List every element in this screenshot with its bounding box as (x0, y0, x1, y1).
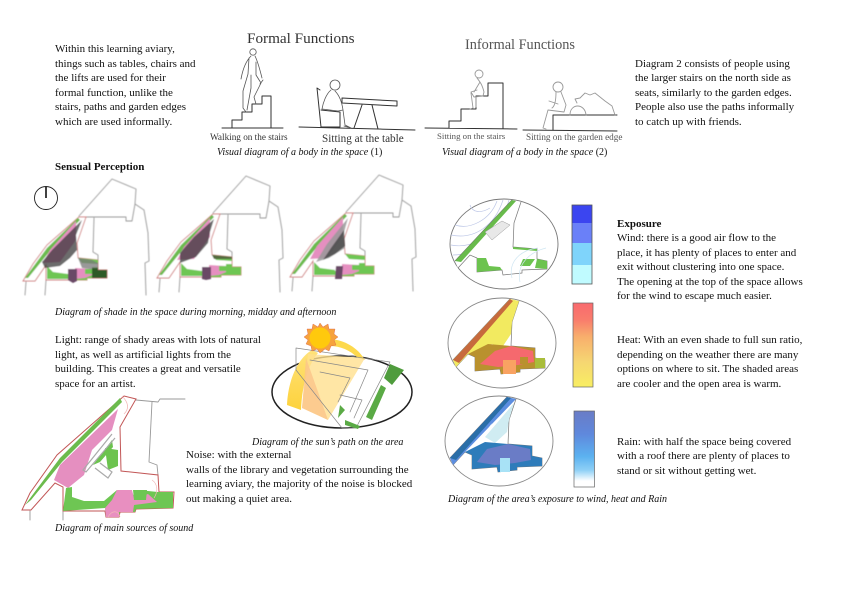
text: exposure and wind: place, it has plenty of places to enter and (617, 247, 797, 259)
icon: sun (304, 323, 338, 353)
panel: formal functions diagram (210, 30, 415, 145)
text: formal and informal use intro: Within this learning aviary, (55, 43, 175, 55)
text: heat description: are cooler and the open area is warm. (617, 378, 782, 390)
diagram: wind exposure (450, 199, 558, 289)
icon: person sitting at table (299, 80, 415, 130)
text: diagram two description: to catch up with friends. (635, 116, 742, 128)
panel: informal functions diagram (425, 37, 622, 142)
diagram: heat exposure (448, 298, 556, 388)
diagram: rain exposure (445, 396, 553, 486)
text: noise description: walls of the library and vegetation surrounding the (186, 464, 409, 476)
caption: sound map: Diagram of main sources of sound (54, 523, 194, 534)
legend: rain scale (574, 411, 594, 487)
sun path band (287, 350, 318, 410)
text: diagram two description: seats, similarly to the garden edges. (635, 87, 792, 99)
map: midday shade (157, 176, 283, 292)
text: heat description: depending on the weather there are many (617, 349, 799, 361)
map: afternoon shade (290, 175, 416, 291)
text: diagram two description: the larger stairs on the north side as (635, 72, 791, 84)
text: rain description: with a roof there are plenty of places to (617, 450, 790, 462)
text: formal and informal use intro: which are used informally. (55, 116, 172, 128)
text: noise description: out making a quiet area. (186, 493, 292, 505)
caption: shade maps: Diagram of shade in the space during morning, midday and afternoon (54, 307, 336, 318)
text: exposure and wind: exit without clustering into one space. (617, 261, 785, 273)
text: noise description: Noise: with the external (186, 449, 291, 461)
legend: wind scale (572, 205, 592, 284)
label: walking on the stairs: Walking on the stairs (210, 132, 288, 142)
icon: person sitting on garden edge (523, 82, 617, 131)
text: light description: Light: range of shady areas with lots of natural (55, 334, 261, 346)
heading: informal functions: Informal Functions (465, 37, 575, 53)
caption: body diagram two: Visual diagram of a body in the space (2) (442, 147, 607, 158)
text: light description: building. This creates a great and versatile (55, 363, 241, 375)
text: rain description: stand or sit without getting wet. (617, 465, 757, 477)
legend: heat scale (573, 303, 593, 387)
text: exposure and wind: Wind: there is a good air flow to the (617, 232, 776, 244)
label: sitting on the stairs: Sitting on the stairs (437, 131, 506, 141)
label: sitting at the table: Sitting at the table (322, 133, 404, 145)
text: heat description: options on where to sit. The shaded areas (617, 363, 798, 375)
icon: person sitting on stairs (425, 70, 517, 129)
text: formal and informal use intro: the lifts are used for their (55, 72, 166, 84)
text: heat description: Heat: With an even shade to full sun ratio, (617, 334, 803, 346)
heading: formal functions: Formal Functions (247, 30, 355, 47)
text: light description: light, as well as artificial lights from the (55, 349, 231, 361)
text: exposure and wind: for the wind to escape much easier. (617, 290, 772, 302)
heading: sensual perception: Sensual Perception (55, 161, 144, 173)
text: diagram two description: Diagram 2 consists of people using (635, 58, 790, 70)
text: noise description: learning aviary, the majority of the noise is blocked (186, 478, 413, 490)
caption: body diagram one: Visual diagram of a body in the space (1) (217, 147, 382, 158)
building plan (296, 348, 390, 428)
label: sitting on the garden edge: Sitting on the garden edge (526, 132, 622, 142)
text: exposure and wind: Exposure (617, 218, 662, 230)
text: formal and informal use intro: stairs, paths and garden edges (55, 101, 186, 113)
text: formal and informal use intro: formal function, unlike the (55, 87, 173, 99)
map: morning shade (23, 179, 149, 295)
sun rays on building (302, 354, 365, 420)
caption: exposure diagrams: Diagram of the area’s exposure to wind, heat and Rain (447, 494, 667, 505)
diagram: sun path on the area (272, 323, 412, 429)
icon: clock (34, 186, 58, 210)
text: formal and informal use intro: things such as tables, chairs and (55, 58, 196, 70)
map: main sources of sound (22, 396, 185, 520)
text: diagram two description: People also use the paths informally (635, 101, 795, 113)
text: rain description: Rain: with half the space being covered (617, 436, 792, 448)
icon: person walking on stairs (222, 49, 283, 128)
text: exposure and wind: The opening at the top of the space allows (617, 276, 803, 288)
text: light description: space for an artist. (55, 378, 136, 390)
caption: sun path: Diagram of the sun’s path on the area (251, 437, 403, 448)
